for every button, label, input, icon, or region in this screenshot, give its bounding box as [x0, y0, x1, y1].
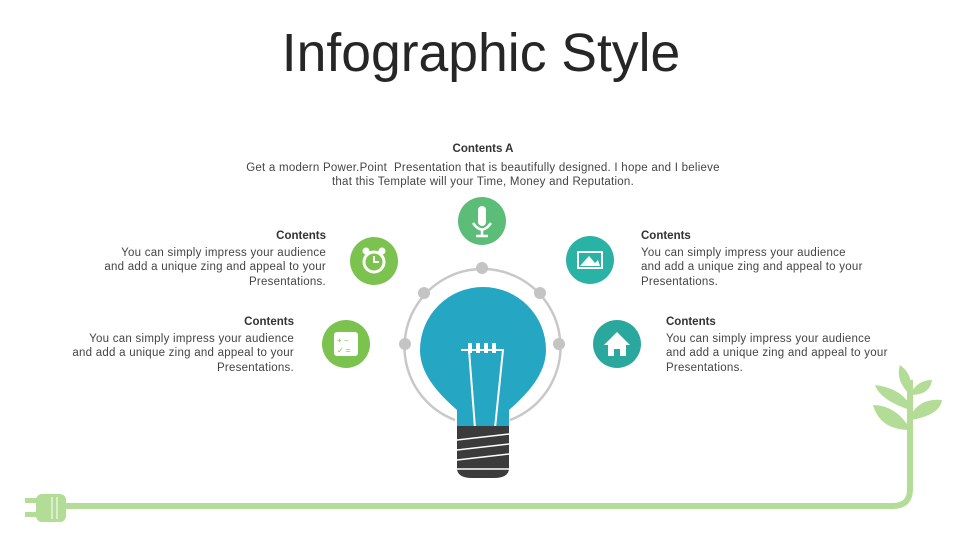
text: left bottom: Presentations.: [217, 362, 294, 374]
text: right top: and add a unique zing and appeal to your: [641, 261, 863, 273]
text: left top: [104, 230, 326, 288]
icon: calculator: [322, 320, 370, 368]
text: left top: Presentations.: [249, 276, 326, 288]
cord and plug: [25, 380, 910, 522]
plant leaves: [873, 365, 942, 430]
text: left bottom: [72, 316, 294, 374]
text: right top: [641, 230, 863, 288]
title: Infographic Style: [282, 24, 680, 83]
icon: image: [566, 236, 614, 284]
text: right bottom: You can simply impress your audience: [666, 333, 871, 345]
icon: calculator: ✓ =: [337, 346, 351, 355]
text: right top: Contents: [641, 230, 691, 242]
text: contents A: [246, 143, 720, 188]
text: right top: Presentations.: [641, 276, 718, 288]
text: left bottom: Contents: [244, 316, 294, 328]
text: right bottom: Presentations.: [666, 362, 743, 374]
text: contents A: Get a modern Power.Point Presentation that is beautifully designed. I hope and I believe: [246, 162, 720, 174]
text: left top: and add a unique zing and appeal to your: [104, 261, 326, 273]
text: left bottom: and add a unique zing and appeal to your: [72, 347, 294, 359]
text: right bottom: [666, 316, 888, 374]
icon: home: [593, 320, 641, 368]
text: right top: You can simply impress your audience: [641, 247, 846, 259]
arc with dots: [399, 262, 565, 420]
text: left top: Contents: [276, 230, 326, 242]
text: left top: You can simply impress your audience: [121, 247, 326, 259]
icon: mic: [458, 197, 506, 245]
text: contents A: Contents A: [453, 143, 513, 155]
bulb: [420, 287, 546, 478]
text: right bottom: and add a unique zing and appeal to your: [666, 347, 888, 359]
icon: calculator: + −: [337, 336, 349, 345]
text: right bottom: Contents: [666, 316, 716, 328]
text: contents A: that this Template will your Time, Money and Reputation.: [332, 176, 634, 188]
icon: alarm: [350, 237, 398, 285]
text: left bottom: You can simply impress your audience: [89, 333, 294, 345]
